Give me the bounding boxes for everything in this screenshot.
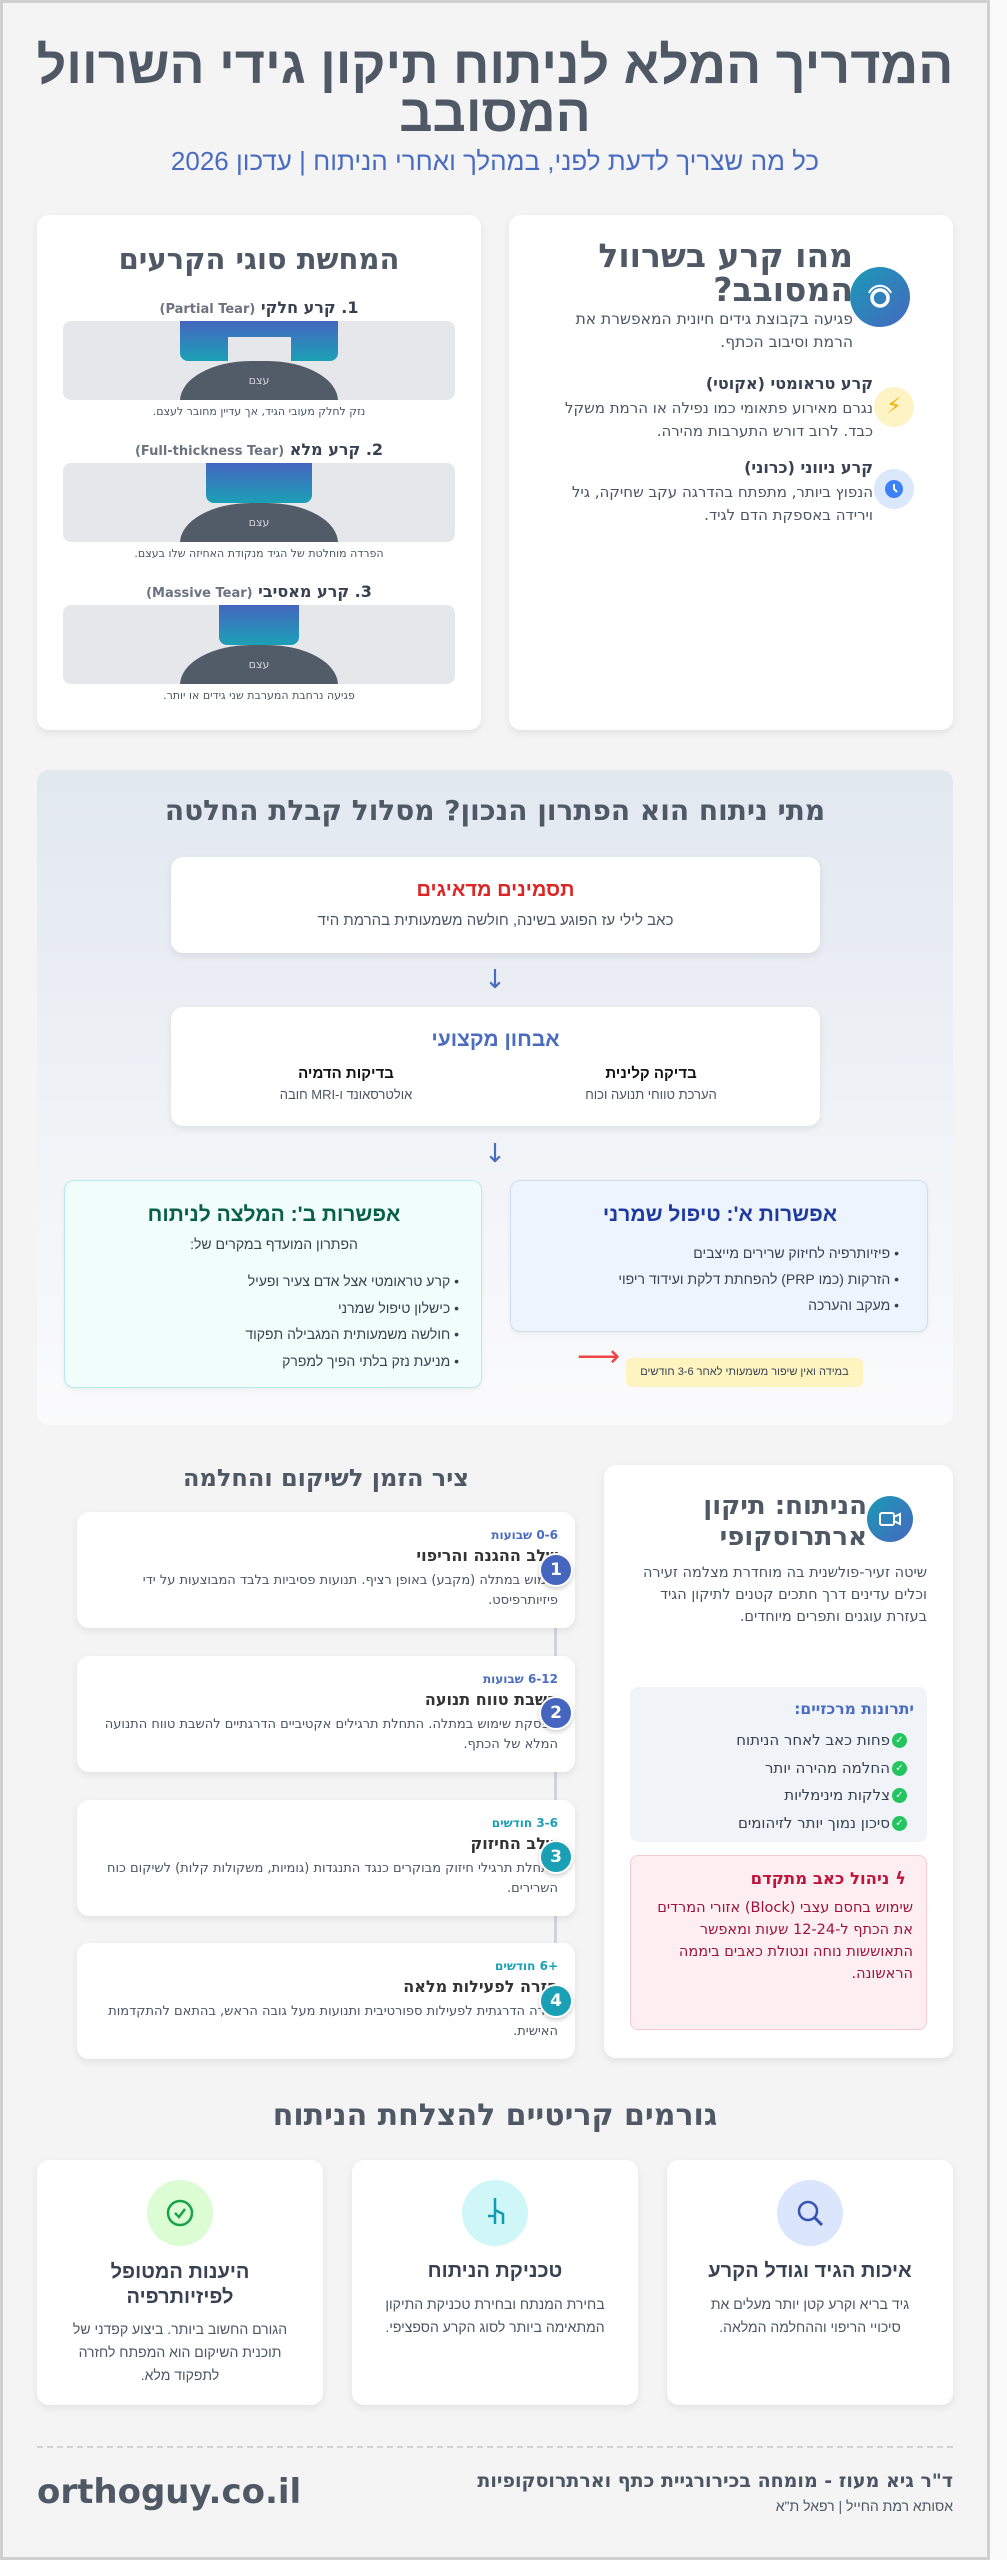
- icon: shoulder: [850, 267, 910, 327]
- card: patient compliance: תוכנית השיקום הוא המפתח לחזרה: [79, 2344, 281, 2360]
- callout: pain management: ϟ ניהול כאב מתקדם: [751, 1869, 906, 1888]
- timeline step 1: [77, 1512, 575, 1628]
- advantages box: החלמה מהירה יותר: [765, 1759, 890, 1777]
- badge 2: [539, 1696, 573, 1730]
- card: patient compliance: לפיזיותרפיה: [127, 2286, 233, 2308]
- timeline step 4: האישית.: [513, 2024, 558, 2039]
- timeline step 1: שלב ההגנה והריפוי: [416, 1546, 558, 1565]
- option A: conservative: • מעקב והערכה: [808, 1297, 899, 1313]
- advantages box: פחות כאב לאחר הניתוח: [736, 1731, 890, 1749]
- timeline step 3: שלב החיזוק: [470, 1834, 558, 1853]
- option B: surgery: הפתרון המועדף במקרים של:: [190, 1236, 358, 1252]
- card: patient compliance: הגורם החשוב ביותר. ביצוע קפדני של: [73, 2321, 287, 2337]
- column: clinical exam: הערכת טווחי תנועה וכוח: [585, 1087, 717, 1102]
- item: degenerative: [572, 458, 914, 524]
- tear 3 label: 3. קרע מאסיבי (Massive Tear): [146, 582, 372, 601]
- panel: decision path: [37, 770, 953, 1425]
- badge 3: [539, 1840, 573, 1874]
- advantages box: ✓: [895, 1818, 904, 1829]
- item: degenerative: וירידה באספקת הדם לגיד.: [704, 506, 873, 524]
- description: [643, 1565, 927, 1625]
- icon: camera: [867, 1496, 913, 1542]
- column: imaging: [280, 1065, 412, 1102]
- option A: conservative: • פיזיותרפיה לחיזוק שרירים מייצבים: [693, 1245, 899, 1261]
- badge 4: [539, 1984, 573, 2018]
- card: tendon quality: גיד בריא וקרע קטן יותר מעלים את: [711, 2296, 909, 2312]
- panel: what is a rotator cuff tear: [509, 215, 953, 730]
- item: degenerative: קרע ניווני (כרוני): [744, 458, 873, 477]
- callout: pain management: [630, 1855, 927, 2030]
- callout: pain management: שימוש בחסם עצבי (Block) אזורי המרדים: [657, 1900, 913, 1916]
- column: clinical exam: [585, 1065, 717, 1102]
- timeline step 4: חזרה הדרגתית לפעילות ספורטיבית ותנועות מעל גובה הראש, בהתאם להתקדמות: [108, 2004, 558, 2019]
- option B: surgery: • מניעת נזק בלתי הפיך למפרק: [282, 1352, 459, 1368]
- caption 2: הפרדה מוחלטת של הגיד מנקודת האחיזה שלו בעצם.: [134, 547, 384, 560]
- timeline line: [554, 1600, 557, 1960]
- diagram: full thickness: עצם: [249, 516, 269, 529]
- diagram: full thickness: [63, 463, 455, 542]
- column: clinical exam: בדיקה קלינית: [605, 1065, 697, 1082]
- timeline step 3: השרירים.: [507, 1881, 558, 1896]
- heading: הניתוח: תיקון: [703, 1491, 867, 1521]
- timeline step 1: שימוש במתלה (מקבע) באופן רציף. תנועות פסיביות בלבד המבוצעות על ידי: [143, 1573, 558, 1588]
- icon: check: [147, 2180, 213, 2246]
- item: traumatic: קרע טראומטי (אקוטי): [706, 374, 873, 393]
- card: tendon quality: [667, 2160, 953, 2405]
- timeline step 2: 6-12 שבועות: [483, 1672, 558, 1686]
- option A: conservative: אפשרות א': טיפול שמרני: [603, 1203, 837, 1226]
- timeline step 4: [77, 1943, 575, 2059]
- card: surgical technique: [352, 2160, 638, 2405]
- advantages box: ✓: [895, 1735, 904, 1746]
- heading: [703, 1491, 867, 1552]
- intro text: פגיעה בקבוצת גידים חיונית המאפשרת את: [576, 310, 853, 328]
- tear 1 label: 1. קרע חלקי (Partial Tear): [159, 298, 358, 317]
- heading: ארתרוסקופי: [720, 1522, 867, 1552]
- callout: pain management: הראשונה.: [852, 1966, 913, 1982]
- icon: lightning: [874, 387, 914, 427]
- timeline step 2: [77, 1656, 575, 1772]
- timeline step 2: המלא של הכתף.: [463, 1737, 558, 1752]
- badge 2: 2: [550, 1703, 562, 1723]
- callout: pain management: התאוששות נוחה ונטולת כאבים ביממה: [679, 1944, 913, 1960]
- option B: surgery: • חולשה משמעותית המגבילה תפקוד: [245, 1326, 459, 1342]
- callout: no improvement: [626, 1358, 863, 1387]
- description: שיטה זעיר-פולשנית בה מוחדרת מצלמה זעירה: [643, 1565, 927, 1581]
- diagram: massive: [63, 605, 455, 684]
- badge 4: 4: [550, 1991, 562, 2011]
- box: diagnosis: [171, 1007, 820, 1126]
- badge 3: 3: [550, 1847, 562, 1867]
- advantages box: סיכון נמוך יותר לזיהומים: [738, 1814, 890, 1832]
- item: degenerative: הנפוץ ביותר, מתפתח בהדרגה עקב שחיקה, גיל: [572, 483, 873, 501]
- footer: doctor name: אסותא רמת החייל | רפאל ת"א: [776, 2498, 953, 2514]
- intro text: [576, 310, 853, 351]
- arrow: ↓: [484, 1139, 506, 1169]
- card: patient compliance: [37, 2160, 323, 2405]
- advantages box: [630, 1687, 927, 1842]
- footer: doctor name: [477, 2470, 953, 2514]
- timeline step 3: התחלת תרגילי חיזוק מבוקרים כנגד התנגדות (גומיות, משקולות קלות) לשיקום כוח: [107, 1861, 558, 1876]
- box: warning signs: תסמינים מדאיגים: [417, 879, 574, 901]
- advantages box: ✓: [895, 1763, 904, 1774]
- heading: המחשת סוגי הקרעים: [119, 242, 399, 276]
- advantages box: צלקות מינימליות: [784, 1786, 890, 1804]
- diagram: partial tear: עצם: [249, 374, 269, 387]
- box: warning signs: [171, 857, 820, 953]
- advantages box: יתרונות מרכזיים:: [794, 1700, 914, 1718]
- heading: מתי ניתוח הוא הפתרון הנכון? מסלול קבלת החלטה: [165, 794, 825, 827]
- heading: [598, 236, 853, 309]
- divider: [37, 2446, 953, 2448]
- timeline step 4: חזרה לפעילות מלאה: [403, 1977, 558, 1996]
- card: surgical technique: המתאימה ביותר לסוג הקרע הספציפי.: [385, 2319, 605, 2335]
- icon: lightning: ⚡: [886, 394, 902, 419]
- diagram: massive: עצם: [249, 658, 269, 671]
- intro text: הרמת וסיבוב הכתף.: [720, 333, 853, 351]
- timeline step 3: 3-6 חודשים: [492, 1816, 558, 1830]
- card: surgical technique: טכניקת הניתוח: [428, 2260, 562, 2282]
- option A: conservative: • הזרקות (כמו PRP) להפחתת דלקת ועידוד ריפוי: [618, 1271, 899, 1287]
- icon: search: [777, 2180, 843, 2246]
- item: traumatic: נגרם מאירוע פתאומי כמו נפילה או הרמת משקל: [565, 399, 873, 417]
- title: [37, 37, 953, 143]
- option B: surgery: • כישלון טיפול שמרני: [338, 1300, 459, 1316]
- heading: critical factors: גורמים קריטיים להצלחת הניתוח: [273, 2098, 717, 2133]
- item: traumatic: כבד. לרוב דורש התערבות מהירה.: [657, 422, 873, 440]
- title: המדריך המלא לניתוח תיקון גידי השרוול: [37, 37, 953, 95]
- badge 1: [539, 1553, 573, 1587]
- heading: המסובב?: [713, 270, 853, 309]
- arrow: ↓: [484, 965, 506, 995]
- card: surgical technique: בחירת המנתח ובחירת טכניקת התיקון: [385, 2296, 605, 2312]
- description: וכלים עדינים דרך חתכים קטנים לתיקון הגיד: [660, 1587, 927, 1603]
- column: imaging: אולטרסאונד ו-MRI חובה: [280, 1087, 412, 1102]
- footer: website: orthoguy.co.il: [37, 2472, 301, 2512]
- advantages box: ✓: [895, 1790, 904, 1801]
- timeline step 2: השבת טווח תנועה: [425, 1690, 558, 1709]
- timeline step 1: 0-6 שבועות: [491, 1528, 558, 1542]
- timeline step 3: [77, 1800, 575, 1916]
- icon: clock: [874, 469, 914, 509]
- heading: מהו קרע בשרוול: [598, 236, 853, 275]
- option B: surgery: אפשרות ב': המלצה לניתוח: [148, 1203, 400, 1226]
- badge 1: 1: [550, 1560, 562, 1580]
- panel: tear types: [37, 215, 481, 730]
- callout: no improvement: במידה ואין שיפור משמעותי לאחר 3-6 חודשים: [640, 1366, 849, 1378]
- footer: doctor name: ד"ר גיא מעוז - מומחה בכירורגיית כתף וארתרוסקופיות: [477, 2470, 953, 2492]
- column: imaging: בדיקות הדמיה: [298, 1065, 394, 1082]
- card: tendon quality: איכות הגיד וגודל הקרע: [708, 2260, 912, 2282]
- box: warning signs: כאב לילי עז הפוגע בשינה, חולשה משמעותית בהרמת היד: [318, 912, 673, 929]
- option A: conservative: [510, 1180, 928, 1332]
- icon: technique: [462, 2180, 528, 2246]
- box: diagnosis: אבחון מקצועי: [431, 1028, 560, 1051]
- timeline step 4: +6 חודשים: [495, 1959, 558, 1973]
- card: patient compliance: היענות המטופל: [111, 2261, 249, 2283]
- option B: surgery: • קרע טראומטי אצל אדם צעיר ופעיל: [248, 1273, 459, 1289]
- arrow: red: ⟶: [577, 1339, 620, 1374]
- panel: arthroscopic surgery: [604, 1465, 953, 2058]
- heading: rehab timeline: ציר הזמן לשיקום והחלמה: [183, 1464, 469, 1492]
- option B: surgery: [64, 1180, 482, 1388]
- card: patient compliance: לתפקוד מלא.: [141, 2367, 219, 2383]
- timeline step 1: פיזיותרפיסט.: [488, 1593, 558, 1608]
- timeline step 2: הפסקת שימוש במתלה. התחלת תרגילים אקטיביים הדרגתיים להשבת טווח התנועה: [105, 1717, 558, 1732]
- caption 1: נזק לחלק מעובי הגיד, אך עדיין מחובר לעצם.: [153, 405, 365, 418]
- caption 3: פגיעה נרחבת המערבת שני גידים או יותר.: [163, 689, 355, 702]
- title: המסובב: [399, 85, 591, 143]
- description: בעזרת עוגנים ותפרים מיוחדים.: [740, 1609, 927, 1625]
- card: tendon quality: סיכויי הריפוי וההחלמה המלאה.: [719, 2319, 901, 2335]
- diagram: partial tear: [63, 321, 455, 400]
- subtitle: כל מה שצריך לדעת לפני, במהלך ואחרי הניתוח | עדכון 2026: [171, 146, 819, 176]
- callout: pain management: את הכתף ל-12-24 שעות ומאפשר: [700, 1922, 913, 1938]
- tear 2 label: 2. קרע מלא (Full-thickness Tear): [135, 440, 383, 459]
- item: traumatic: [565, 374, 914, 440]
